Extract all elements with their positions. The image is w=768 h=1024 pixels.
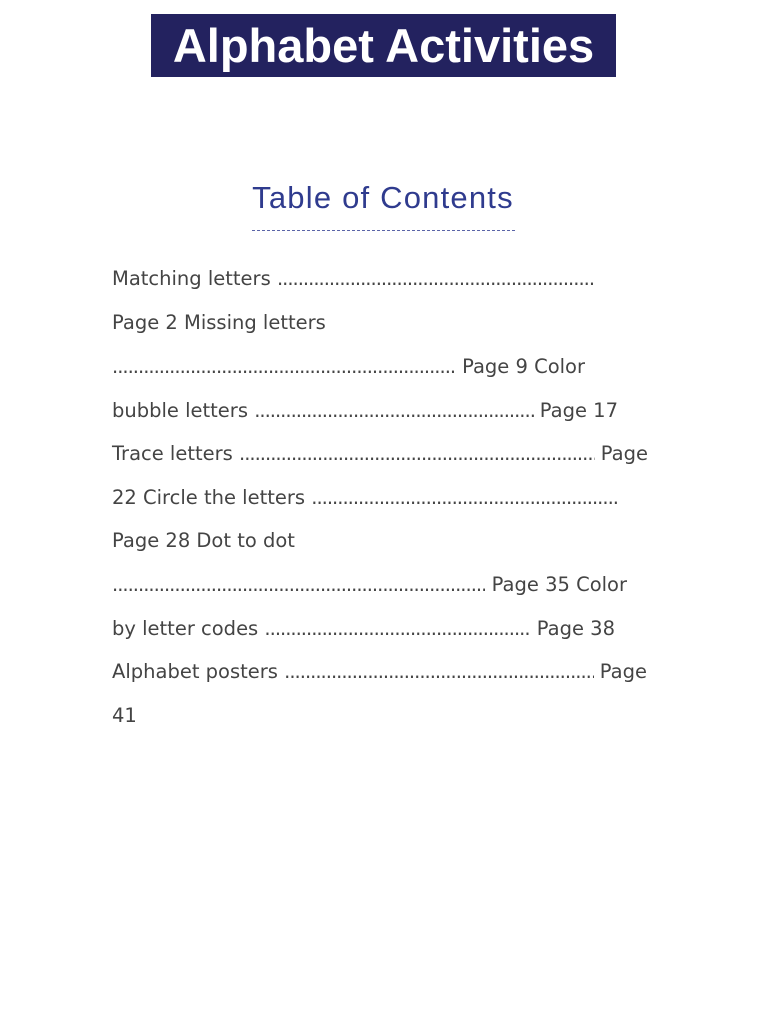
toc line 5: Trace letters bbox=[112, 442, 233, 465]
toc line 4 bbox=[112, 399, 618, 422]
toc line 9 bbox=[112, 617, 615, 640]
toc line 10: Page bbox=[600, 660, 647, 683]
toc line 5 bbox=[112, 442, 648, 465]
toc line 8: Page 35 Color bbox=[492, 573, 627, 596]
toc line 11: 41 bbox=[112, 704, 137, 727]
toc line 3: Page 9 Color bbox=[462, 355, 585, 378]
toc line 6: 22 Circle the letters bbox=[112, 486, 305, 509]
title: Alphabet Activities bbox=[173, 19, 594, 72]
toc line 10: Alphabet posters bbox=[112, 660, 278, 683]
toc line 9: by letter codes bbox=[112, 617, 258, 640]
toc line 5: Page bbox=[601, 442, 648, 465]
toc line 4: bubble letters bbox=[112, 399, 248, 422]
toc line 2: Page 2 Missing letters bbox=[112, 311, 326, 334]
toc line 4: Page 17 bbox=[540, 399, 618, 422]
toc line 1 bbox=[112, 267, 595, 290]
toc line 7: Page 28 Dot to dot bbox=[112, 529, 295, 552]
toc line 6 bbox=[112, 486, 617, 509]
heading: table of contents: Table of Contents bbox=[252, 180, 514, 215]
toc line 9: Page 38 bbox=[537, 617, 615, 640]
toc line 10 bbox=[112, 660, 647, 683]
toc line 1: Matching letters bbox=[112, 267, 271, 290]
